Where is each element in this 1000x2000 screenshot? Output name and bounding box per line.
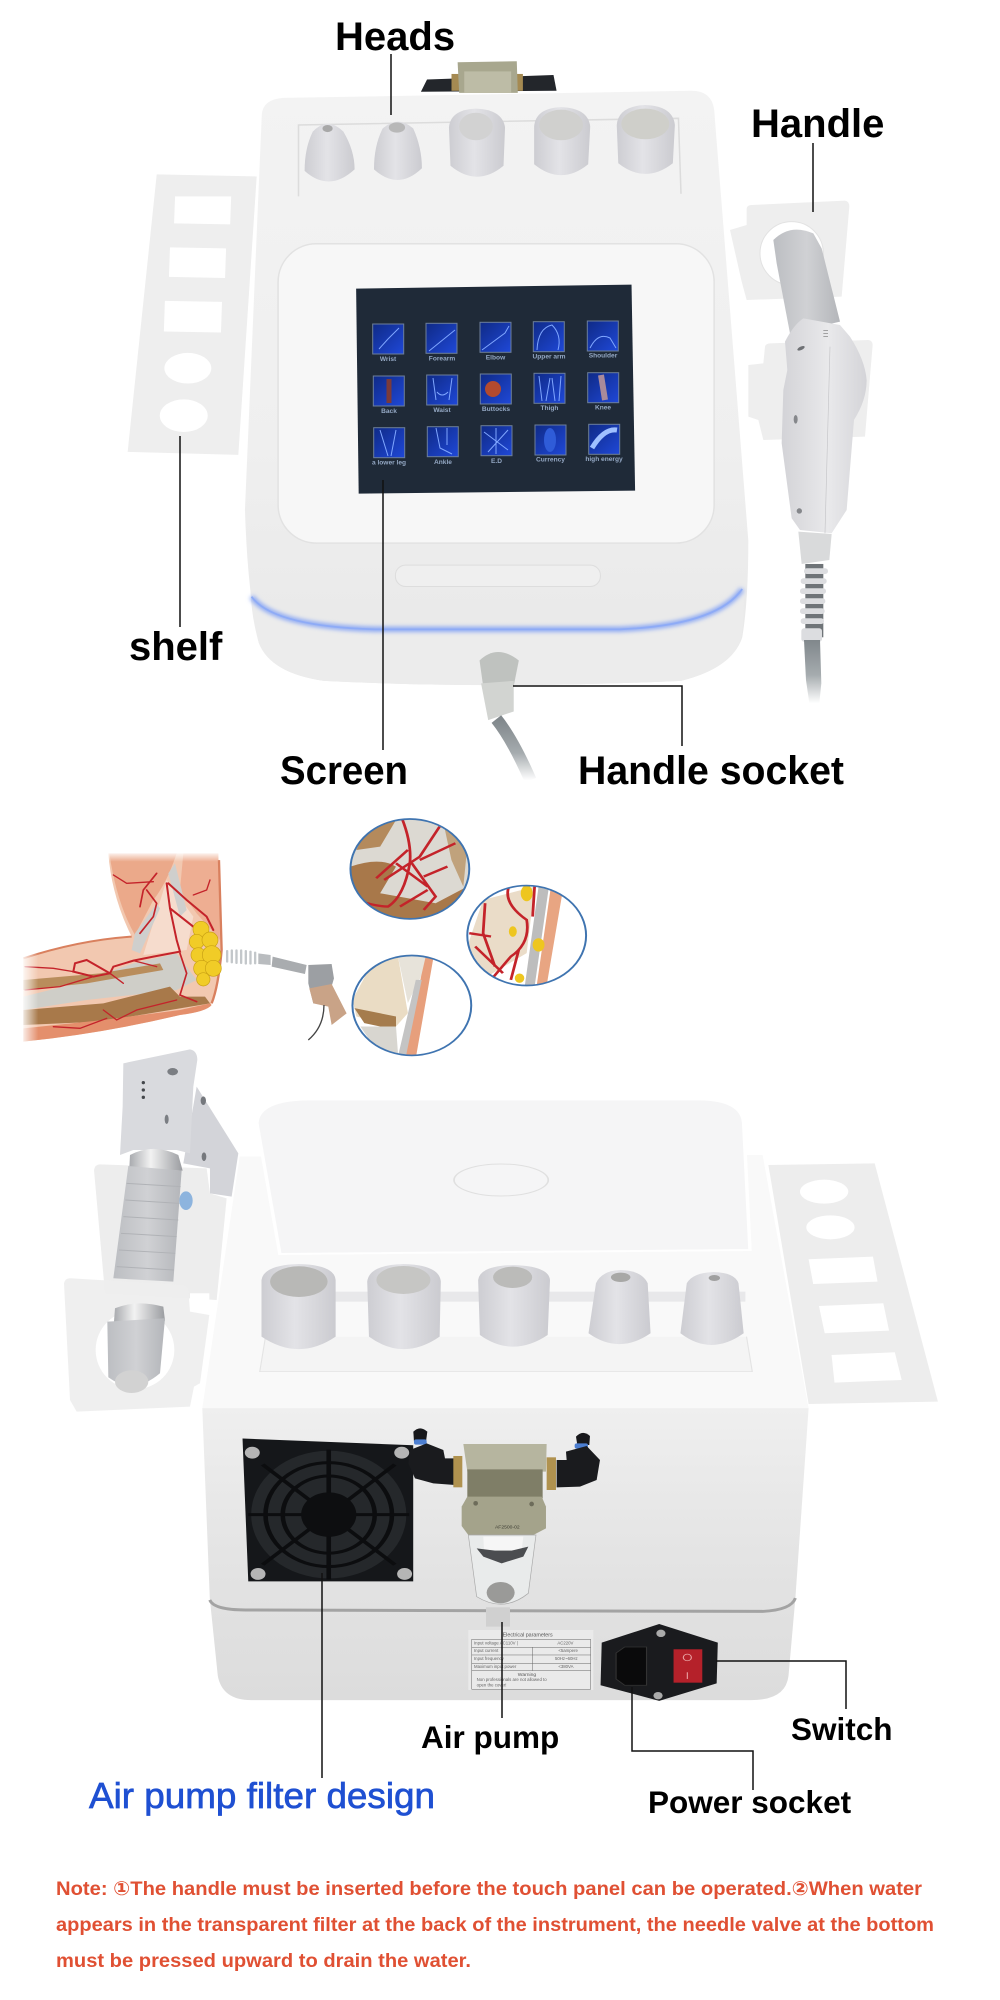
label: Air pump: Air pump <box>421 1719 559 1755</box>
label: Handle socket: Handle socket <box>578 749 844 793</box>
detail circle 2 <box>467 885 586 986</box>
lower indent bar <box>395 565 600 586</box>
cooling fan <box>243 1439 413 1581</box>
lower band <box>251 586 744 685</box>
note line 3: must be pressed upward to drain the water. <box>56 1950 471 1972</box>
label: Handle <box>751 102 884 212</box>
electrical parameters label: Electrical parameters <box>503 1632 553 1638</box>
touch screen <box>356 285 635 494</box>
handle nozzle <box>107 1303 165 1393</box>
radius bone <box>23 963 163 990</box>
body seam <box>210 1598 795 1611</box>
head 5 <box>617 105 675 174</box>
icon: Upper arm <box>533 322 566 360</box>
rear head 1 <box>261 1264 336 1349</box>
drain valve <box>486 1607 510 1627</box>
label: Power socket <box>632 1687 852 1820</box>
icon: Elbow: Elbow <box>486 354 506 362</box>
labels and leader lines <box>89 15 893 1820</box>
rear head 3 <box>478 1265 550 1347</box>
head 1 <box>305 124 355 181</box>
left shelf <box>128 174 257 455</box>
brass connectors <box>453 1456 556 1490</box>
electrical parameters label: Input frequency <box>474 1656 505 1661</box>
icon: a lower leg <box>372 428 406 466</box>
icon: E.D <box>481 426 512 465</box>
electrical parameters label: <380VA <box>558 1664 574 1669</box>
forearm top rim <box>23 937 132 958</box>
rear heads <box>261 1264 744 1349</box>
icon: high energy <box>585 424 623 463</box>
head 3 <box>449 109 505 177</box>
label: shelf: shelf <box>129 625 223 669</box>
icon: Ankle <box>427 427 458 466</box>
blue accent <box>179 1191 193 1210</box>
note <box>56 1878 934 1972</box>
icon: Thigh: Thigh <box>541 405 558 412</box>
icon: Thigh <box>534 373 565 412</box>
front view device <box>128 61 748 780</box>
tray line <box>260 1337 752 1372</box>
heads tray <box>298 118 681 196</box>
inner elbow tissue <box>143 880 193 955</box>
elbow illustration <box>20 852 347 1047</box>
rear bracket upper <box>94 1164 227 1300</box>
upper bracket <box>730 201 849 300</box>
bracket hole <box>96 1311 174 1389</box>
head 4 <box>534 107 590 175</box>
detail circle 1 <box>350 818 469 920</box>
handle cable <box>804 640 821 703</box>
regulator head: AF2500-02 <box>495 1524 520 1530</box>
rear handle and brackets <box>64 1049 238 1412</box>
icon: E.D: E.D <box>491 458 502 465</box>
arteries <box>25 873 213 1028</box>
left air fitting <box>408 1428 455 1485</box>
icon: Wrist: Wrist <box>380 356 397 363</box>
rear head 5 <box>680 1272 744 1345</box>
handle socket connector <box>480 652 519 720</box>
strain relief <box>798 532 832 564</box>
icon: a lower leg: a lower leg <box>372 460 406 466</box>
electrical parameters label: AC220V <box>557 1640 574 1645</box>
electrical parameters label: Input voltage AC110V | <box>474 1640 518 1645</box>
electrical parameters label: 50Hz~60Hz <box>555 1656 578 1661</box>
air pump assembly <box>408 1428 600 1690</box>
touch screen menu <box>372 321 623 466</box>
ribbed tube <box>113 1166 182 1282</box>
transparent filter bowl <box>468 1535 536 1604</box>
icon: Knee <box>588 373 619 412</box>
rear view device top half <box>202 1099 938 1408</box>
screen bezel panel <box>278 244 714 543</box>
right shelf <box>768 1163 938 1404</box>
electrical parameters label: Input current <box>474 1648 499 1653</box>
rear handle grip <box>120 1049 206 1161</box>
icon: Waist <box>427 375 458 414</box>
electrical parameters label: open the cover! <box>477 1683 507 1688</box>
forearm tendons <box>23 953 197 1010</box>
icon: Shoulder <box>587 321 618 360</box>
label: Screen: Screen <box>280 749 408 793</box>
label: Power socket: Power socket <box>648 1784 852 1820</box>
icon: Upper arm: Upper arm <box>533 354 566 360</box>
magnified detail circles <box>350 818 586 1058</box>
oval emboss <box>454 1164 548 1196</box>
upper arm muscle <box>109 853 177 935</box>
icon: Currency: Currency <box>536 456 565 464</box>
icon: Ankle: Ankle <box>434 459 452 466</box>
notch in bracket <box>190 1293 209 1309</box>
icon: Forearm <box>426 323 457 362</box>
regulator head <box>462 1444 547 1535</box>
label: Switch: Switch <box>791 1711 893 1747</box>
body top surface <box>202 1155 809 1408</box>
note line 2: appears in the transparent filter at the back of the instrument, the needle valve at the bottom <box>56 1914 934 1936</box>
icon: Buttocks <box>480 374 511 413</box>
back panel <box>202 1408 809 1700</box>
ulna bone <box>23 987 210 1025</box>
outer arm muscle <box>180 853 220 940</box>
blue light strip <box>252 589 742 629</box>
note line 1: Note: ①The handle must be inserted before the touch panel can be operated.②When water <box>56 1878 922 1900</box>
label: Air pump <box>421 1622 559 1755</box>
icon: high energy: high energy <box>585 456 623 463</box>
rear view device back panel <box>202 1408 809 1701</box>
rear head 2 <box>367 1264 441 1349</box>
lower bracket <box>748 340 873 440</box>
label: Air pump filter design: Air pump filter design <box>89 1775 435 1816</box>
icon: Buttocks: Buttocks <box>482 406 510 413</box>
soft fade on arm edges <box>20 852 227 1047</box>
outer rim <box>212 860 222 1003</box>
icon: Currency <box>535 425 566 464</box>
mini handpiece <box>258 953 347 1040</box>
silver collar <box>129 1149 183 1171</box>
rear bracket lower <box>64 1278 209 1412</box>
electrical parameters label: Non professionals are not allowed to <box>477 1677 547 1682</box>
label: Switch <box>716 1661 893 1747</box>
main body <box>245 91 748 685</box>
handle mounting brackets <box>730 201 873 440</box>
label: Handle socket <box>513 686 844 793</box>
triangular bracket <box>183 1087 238 1197</box>
socket cable <box>496 719 531 780</box>
spring coil <box>800 564 828 642</box>
rear head 4 <box>588 1270 651 1344</box>
label: Heads: Heads <box>335 15 455 59</box>
label: Handle: Handle <box>751 102 884 146</box>
heads <box>305 105 675 181</box>
icon: Waist: Waist <box>433 407 451 414</box>
front handle <box>773 230 867 703</box>
electrical parameters label: Warning <box>518 1672 536 1678</box>
icon: Back: Back <box>381 408 397 415</box>
electrical parameters label: <5ampere <box>558 1648 579 1653</box>
calcification <box>189 921 221 986</box>
shockwave rings <box>226 949 256 965</box>
icon: Back <box>373 376 404 415</box>
icon: Knee: Knee <box>595 404 611 412</box>
electrical parameters label <box>468 1630 593 1690</box>
handle tube <box>773 230 840 333</box>
electrical parameters label: Maximum input power <box>474 1664 517 1669</box>
icon: Wrist <box>373 324 404 363</box>
icon: Shoulder: Shoulder <box>589 352 618 360</box>
label: Heads <box>335 15 455 115</box>
head 2 <box>374 122 422 180</box>
arm silhouette <box>23 853 222 1042</box>
right air fitting <box>557 1433 600 1487</box>
handle grip <box>782 318 867 533</box>
power module <box>601 1624 718 1701</box>
icon: Forearm: Forearm <box>429 356 455 362</box>
heads strip <box>326 1292 745 1302</box>
detail circle 3 <box>352 956 471 1058</box>
top recess <box>257 1099 750 1254</box>
tendon <box>132 863 187 953</box>
bottom muscle rim <box>23 1003 212 1042</box>
air filter on top <box>421 61 557 93</box>
icon: Elbow <box>480 322 511 362</box>
